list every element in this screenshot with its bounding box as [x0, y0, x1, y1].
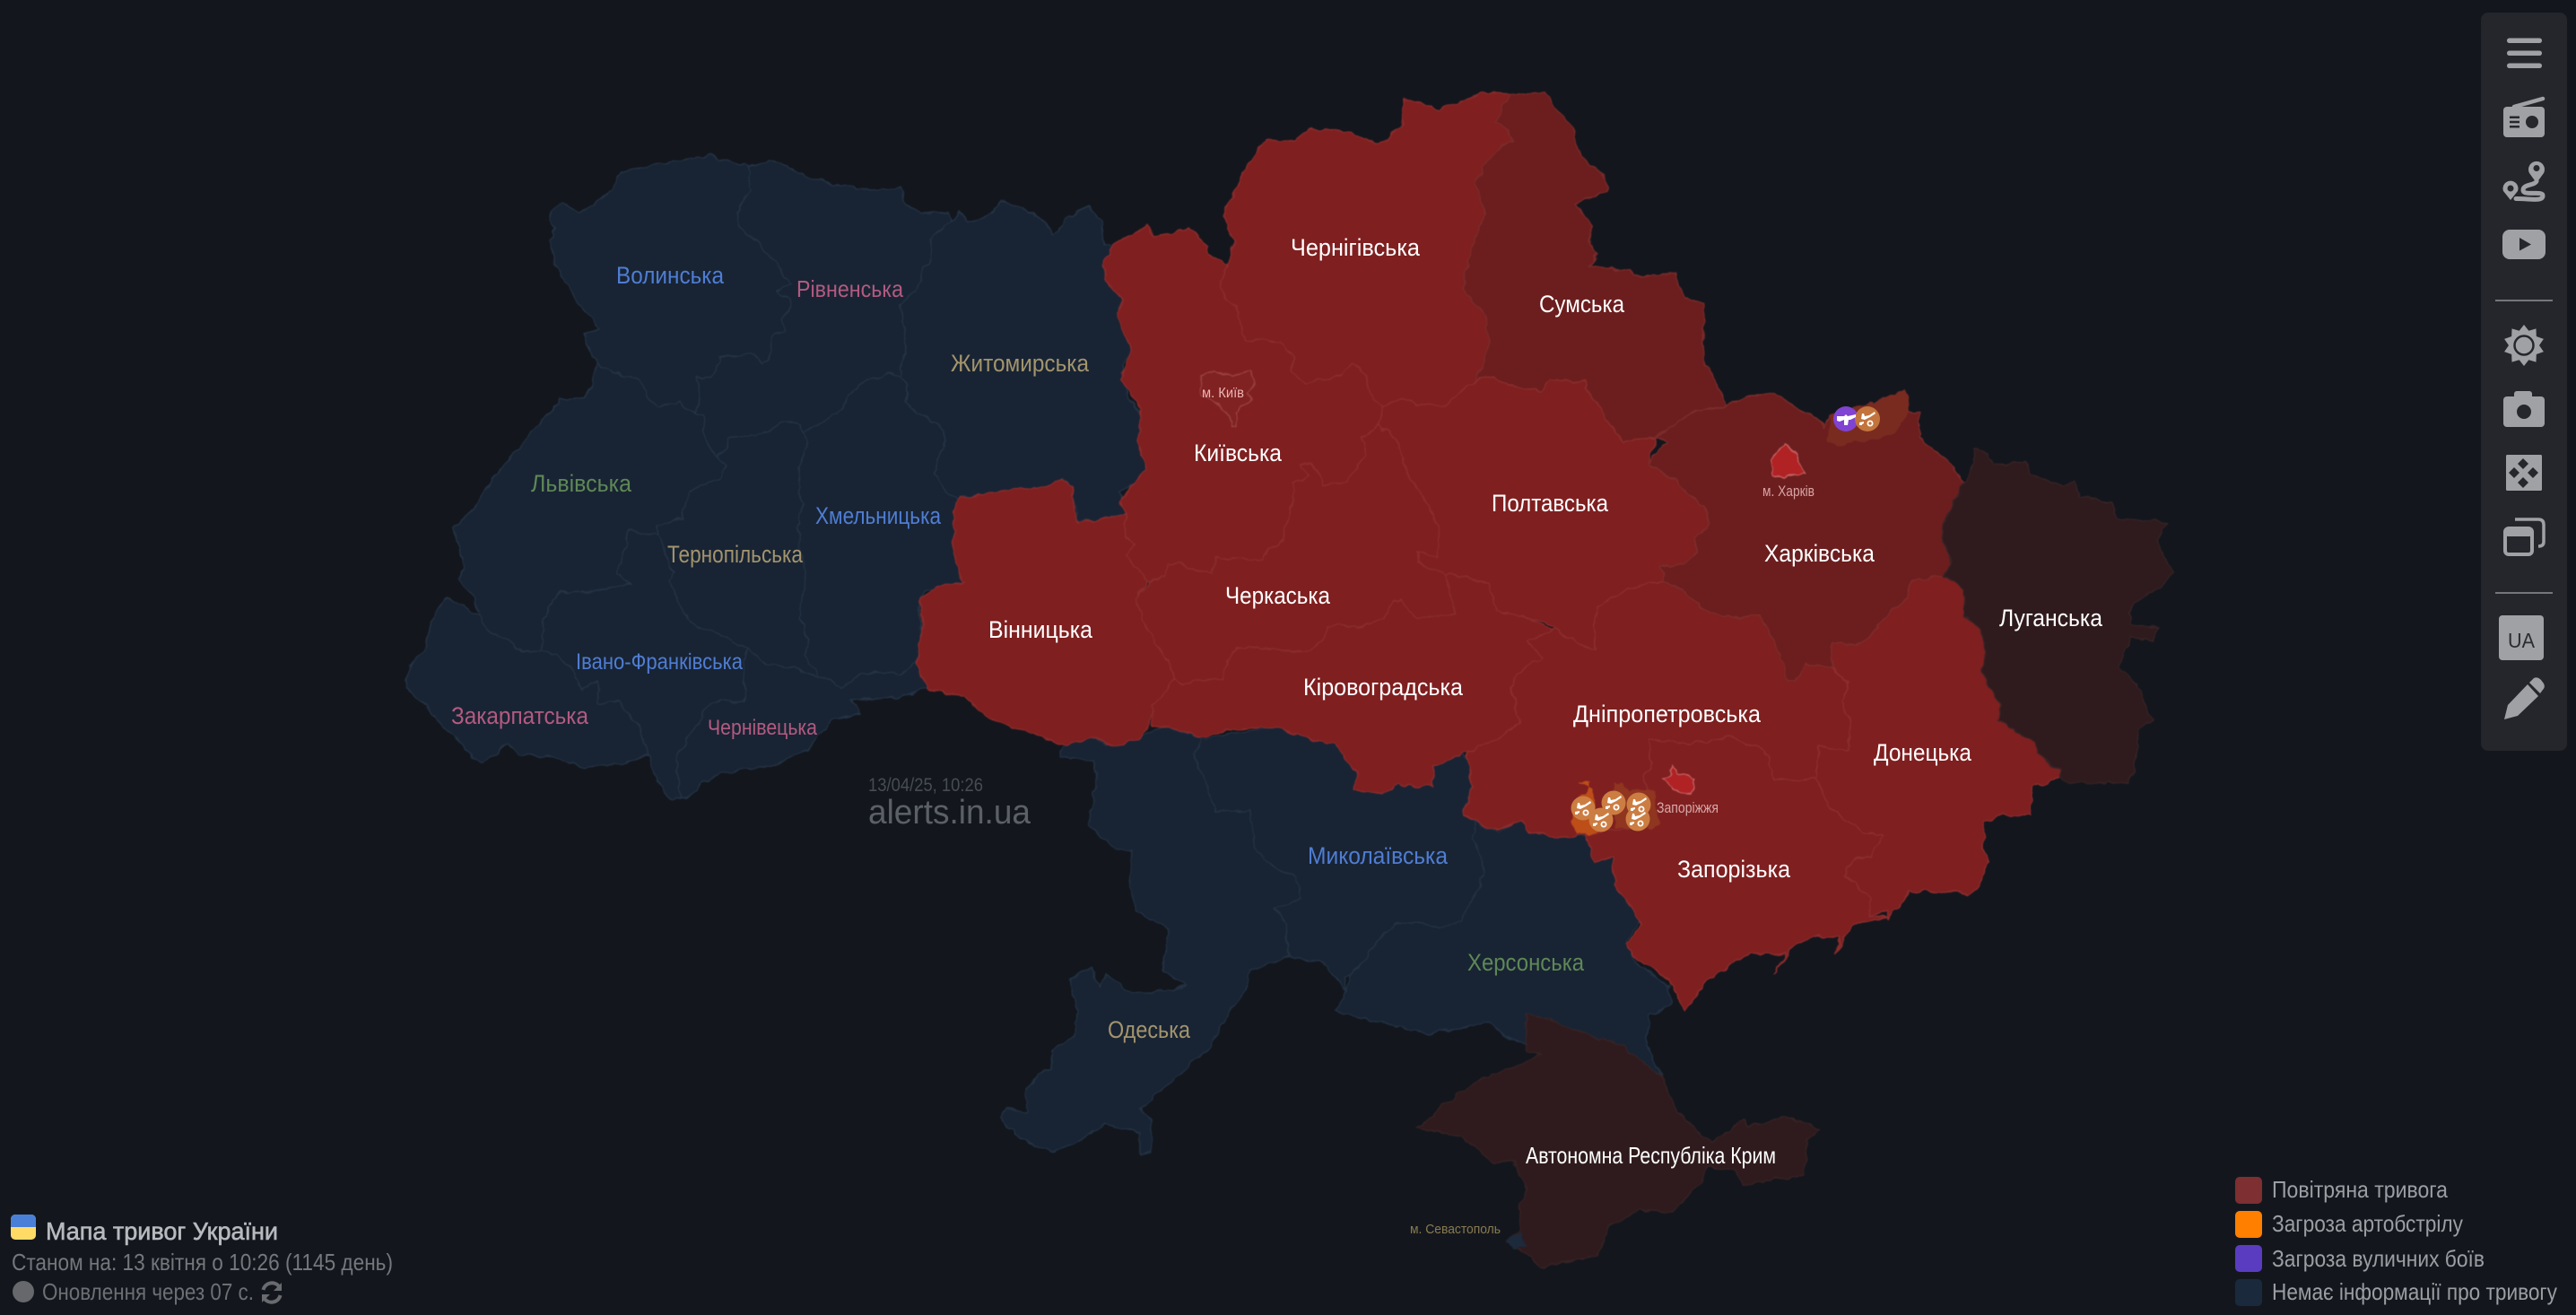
map of Ukraine: oblast shapes — [406, 91, 2173, 1267]
label: Chernivtsi: Чернівецька — [708, 716, 818, 740]
label: Kirovohrad: Кіровоградська — [1303, 674, 1464, 701]
region: Chernivtsi — [676, 648, 929, 799]
region: Kyiv city — [1201, 370, 1255, 426]
label: Khmelnytskyi: Хмельницька — [815, 502, 942, 529]
label: Kherson: Херсонська — [1467, 949, 1585, 976]
label: Kharkiv oblast: Харківська — [1764, 540, 1875, 567]
panel: title and status — [11, 1215, 393, 1305]
icon: status dot — [13, 1281, 34, 1302]
region: Kharkiv oblast — [1649, 390, 1964, 681]
label: Rivne: Рівненська — [796, 275, 903, 302]
label: Zaporizhzhia city: Запоріжжя — [1657, 799, 1719, 816]
region: Lviv — [454, 362, 726, 652]
legend item: air alert: Повітряна тривога — [2272, 1176, 2448, 1203]
label: Crimea: Автономна Республіка Крим — [1526, 1142, 1776, 1169]
title: Мапа тривог України — [46, 1217, 278, 1245]
icon: menu — [2507, 38, 2542, 68]
region: Zakarpattia — [406, 597, 648, 768]
icon: settings — [2504, 325, 2544, 366]
threat area: artillery zone in north Kharkiv — [1827, 390, 1910, 446]
label: Zhytomyr: Житомирська — [951, 350, 1090, 377]
panel: eastern oblasts — [1464, 390, 2173, 1011]
panel: southern oblasts — [998, 727, 1821, 1267]
icon: video — [2502, 230, 2546, 259]
region: Ternopil — [656, 422, 821, 679]
button: language UA — [2499, 615, 2544, 660]
region: Donetsk — [1816, 576, 2060, 919]
legend — [2235, 1176, 2557, 1306]
text: status date: Станом на: 13 квітня о 10:26 (1145 день) — [12, 1249, 393, 1276]
button: language UA: UA — [2508, 629, 2536, 652]
label: Kyiv city: м. Київ — [1202, 386, 1244, 401]
label: Poltava: Полтавська — [1492, 490, 1609, 517]
region: Rivne — [694, 161, 951, 458]
text: update countdown: Оновлення через 07 с. — [42, 1278, 254, 1305]
region: Chernihiv — [1222, 91, 1515, 406]
region: Kyiv oblast — [1103, 226, 1383, 583]
label: Ternopil: Тернопільська — [667, 541, 804, 568]
panel: central oblasts — [917, 91, 1726, 794]
label: Luhansk: Луганська — [1999, 605, 2103, 631]
icon: radio — [2503, 99, 2545, 137]
legend item: street fighting threat: Загроза вуличних боїв — [2272, 1245, 2485, 1272]
label: Zaporizhzhia oblast: Запорізька — [1677, 856, 1791, 883]
region: Poltava — [1379, 378, 1710, 650]
region: Vinnytsia — [917, 479, 1175, 745]
region: Volyn — [551, 156, 790, 414]
region: Sumy — [1463, 91, 1726, 442]
legend item: artillery threat: Загроза артобстрілу — [2272, 1210, 2463, 1237]
region: Ivano-Frankivsk — [543, 529, 746, 799]
region: Odesa — [998, 727, 1301, 1154]
watermark: date and site: 13/04/25, 10:26 — [868, 775, 983, 796]
icon: Ukrainian flag — [11, 1215, 36, 1240]
region: Khmelnytskyi — [797, 373, 968, 690]
region: Sevastopol — [1507, 1232, 1527, 1250]
label: Odesa: Одеська — [1108, 1016, 1191, 1043]
region: Mykolaiv — [1195, 727, 1484, 993]
label: Zakarpattia: Закарпатська — [451, 702, 589, 729]
panel: western oblasts — [406, 156, 1146, 799]
label: Vinnytsia: Вінницька — [988, 616, 1093, 643]
label: Kharkiv city: м. Харків — [1762, 483, 1815, 500]
icons: artillery markers near Zaporizhzhia — [1571, 791, 1650, 832]
region: Cherkasy — [1136, 424, 1456, 685]
icon: fullscreen — [2506, 455, 2542, 491]
label: Dnipropetrovsk: Дніпропетровська — [1573, 701, 1762, 727]
label: Sumy: Сумська — [1539, 291, 1625, 318]
label: Donetsk: Донецька — [1874, 739, 1972, 766]
region: Zaporizhzhia city — [1661, 765, 1696, 794]
watermark: date and site: alerts.in.ua — [868, 794, 1031, 832]
icon: route — [2502, 161, 2545, 200]
label: Ivano-Frankivsk: Івано-Франківська — [576, 649, 743, 675]
icon: refresh — [262, 1283, 282, 1302]
icon: windows — [2505, 519, 2544, 554]
label: Kyiv oblast: Київська — [1194, 440, 1283, 466]
region labels — [451, 234, 2103, 1237]
label: Chernihiv: Чернігівська — [1291, 234, 1421, 261]
icon: camera — [2503, 391, 2545, 427]
label: Volyn: Волинська — [616, 262, 725, 289]
region: Luhansk — [1942, 448, 2173, 783]
label: Lviv: Львівська — [531, 470, 632, 497]
threat area: artillery zones near Zaporizhzhia — [1572, 782, 1659, 834]
region: Crimea — [1418, 1014, 1821, 1267]
label: Mykolaiv: Миколаївська — [1308, 842, 1449, 869]
region: Zhytomyr — [901, 202, 1146, 522]
region: Kherson — [1335, 818, 1671, 1076]
region: Kirovohrad — [1152, 574, 1553, 794]
label: Cherkasy: Черкаська — [1225, 582, 1331, 609]
panel: right toolbar — [2481, 13, 2567, 751]
region: Dnipropetrovsk — [1464, 583, 1850, 837]
region: Kharkiv city — [1771, 444, 1804, 478]
watermark: date and site — [868, 775, 1031, 832]
region: Zaporizhzhia — [1585, 737, 1888, 1011]
icons: street fighting and artillery markers near Kharkiv border — [1833, 406, 1880, 431]
label: Sevastopol: м. Севастополь — [1410, 1222, 1501, 1237]
icon: pencil — [2504, 677, 2545, 719]
